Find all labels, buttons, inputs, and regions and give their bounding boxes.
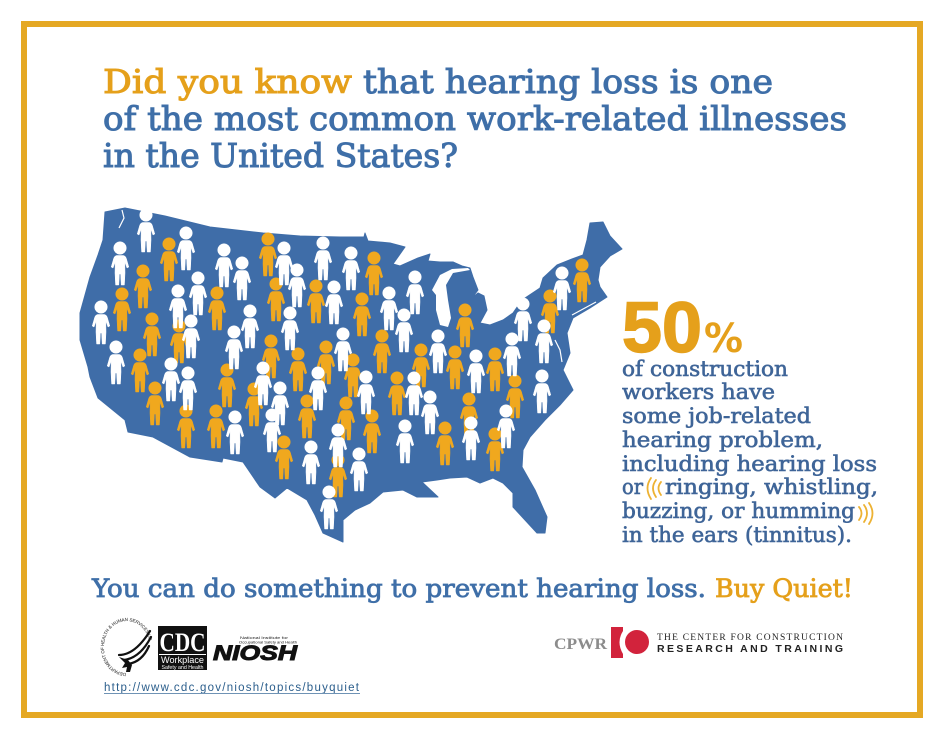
logo: CDC workplace: CDC — [160, 628, 206, 657]
logo: CDC workplace: Safety and Health — [162, 665, 204, 671]
statistic description: hearing problem, — [622, 428, 823, 452]
title: Did you know — [103, 62, 352, 101]
logo: NIOSH — [213, 635, 298, 665]
icon: left sound waves — [648, 478, 661, 499]
logo: HHS seal — [100, 618, 152, 676]
statistic description: or — [622, 475, 644, 499]
logo: CDC workplace — [158, 626, 207, 671]
icon: right sound waves — [859, 503, 872, 524]
title — [103, 62, 847, 175]
logo: HHS seal: DEPARTMENT OF HEALTH & HUMAN SERVICES USA — [100, 618, 152, 676]
statistic description — [622, 357, 878, 547]
US map — [80, 208, 622, 542]
call to action: You can do something to prevent hearing loss. — [91, 574, 706, 603]
statistic description: ringing, whistling, — [665, 475, 878, 499]
website link: http://www.cdc.gov/niosh/topics/buyquiet — [104, 682, 360, 694]
title: of the most common work-related illnesses — [103, 99, 847, 138]
statistic description: including hearing loss — [622, 452, 877, 476]
statistic description: some job-related — [622, 404, 811, 428]
statistic description: of construction — [622, 357, 788, 381]
people on map: white figures — [92, 209, 571, 529]
lake michigan — [432, 268, 470, 327]
logo: CPWR — [554, 627, 843, 658]
50 percent statistic: % — [704, 316, 743, 362]
statistic description: workers have — [622, 380, 775, 404]
title: that hearing loss is one — [363, 62, 773, 101]
logo: NIOSH: Occupational Safety and Health — [239, 640, 297, 644]
people on map: orange figures — [113, 233, 591, 497]
50 percent statistic — [622, 289, 743, 368]
logo: CPWR: THE CENTER FOR CONSTRUCTION — [657, 633, 843, 643]
logo: NIOSH: National Institute for — [240, 635, 289, 640]
50 percent statistic: 50 — [622, 289, 702, 368]
coastal inlets — [119, 210, 596, 362]
title: in the United States? — [103, 136, 458, 175]
call to action: Buy Quiet! — [715, 574, 853, 603]
logo: CPWR: RESEARCH AND TRAINING — [657, 643, 843, 655]
logo: CDC workplace: Workplace — [161, 655, 204, 666]
logo: NIOSH: NIOSH — [213, 642, 298, 665]
statistic description: in the ears (tinnitus). — [622, 523, 852, 547]
logo: CPWR: CPWR — [554, 636, 608, 653]
statistic description: buzzing, or humming — [622, 499, 855, 523]
